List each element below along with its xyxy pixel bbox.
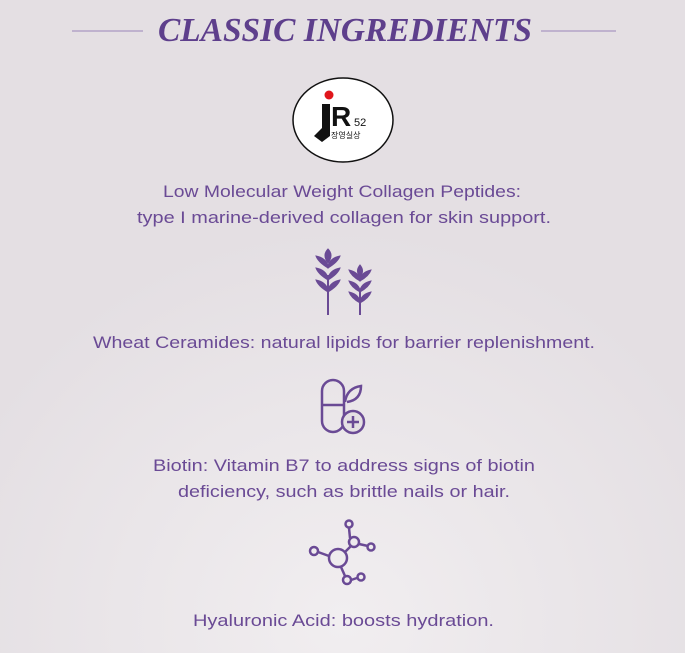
icon: IR52 logo: 52 <box>354 117 366 129</box>
text: biotin: Biotin: Vitamin B7 to address signs of biotin <box>153 456 535 475</box>
icon: IR52 logo: 장영실상 <box>331 130 361 140</box>
text: collagen <box>137 182 551 227</box>
icon: capsule with leaf <box>322 380 364 433</box>
text: wheat ceramides: Wheat Ceramides: natural lipids for barrier replenishment. <box>93 333 595 352</box>
text: collagen: Low Molecular Weight Collagen Peptides: <box>163 182 521 201</box>
text: biotin <box>153 456 535 501</box>
text: hyaluronic acid: Hyaluronic Acid: boosts hydration. <box>193 611 494 630</box>
icon: molecule <box>310 520 374 584</box>
icon: IR52 logo <box>293 78 393 162</box>
icon: IR52 logo: R <box>331 101 351 132</box>
text: collagen: type I marine-derived collagen for skin support. <box>137 208 551 227</box>
title: CLASSIC INGREDIENTS <box>158 12 532 49</box>
icon: wheat <box>316 249 371 315</box>
text: biotin: deficiency, such as brittle nails or hair. <box>178 482 510 501</box>
